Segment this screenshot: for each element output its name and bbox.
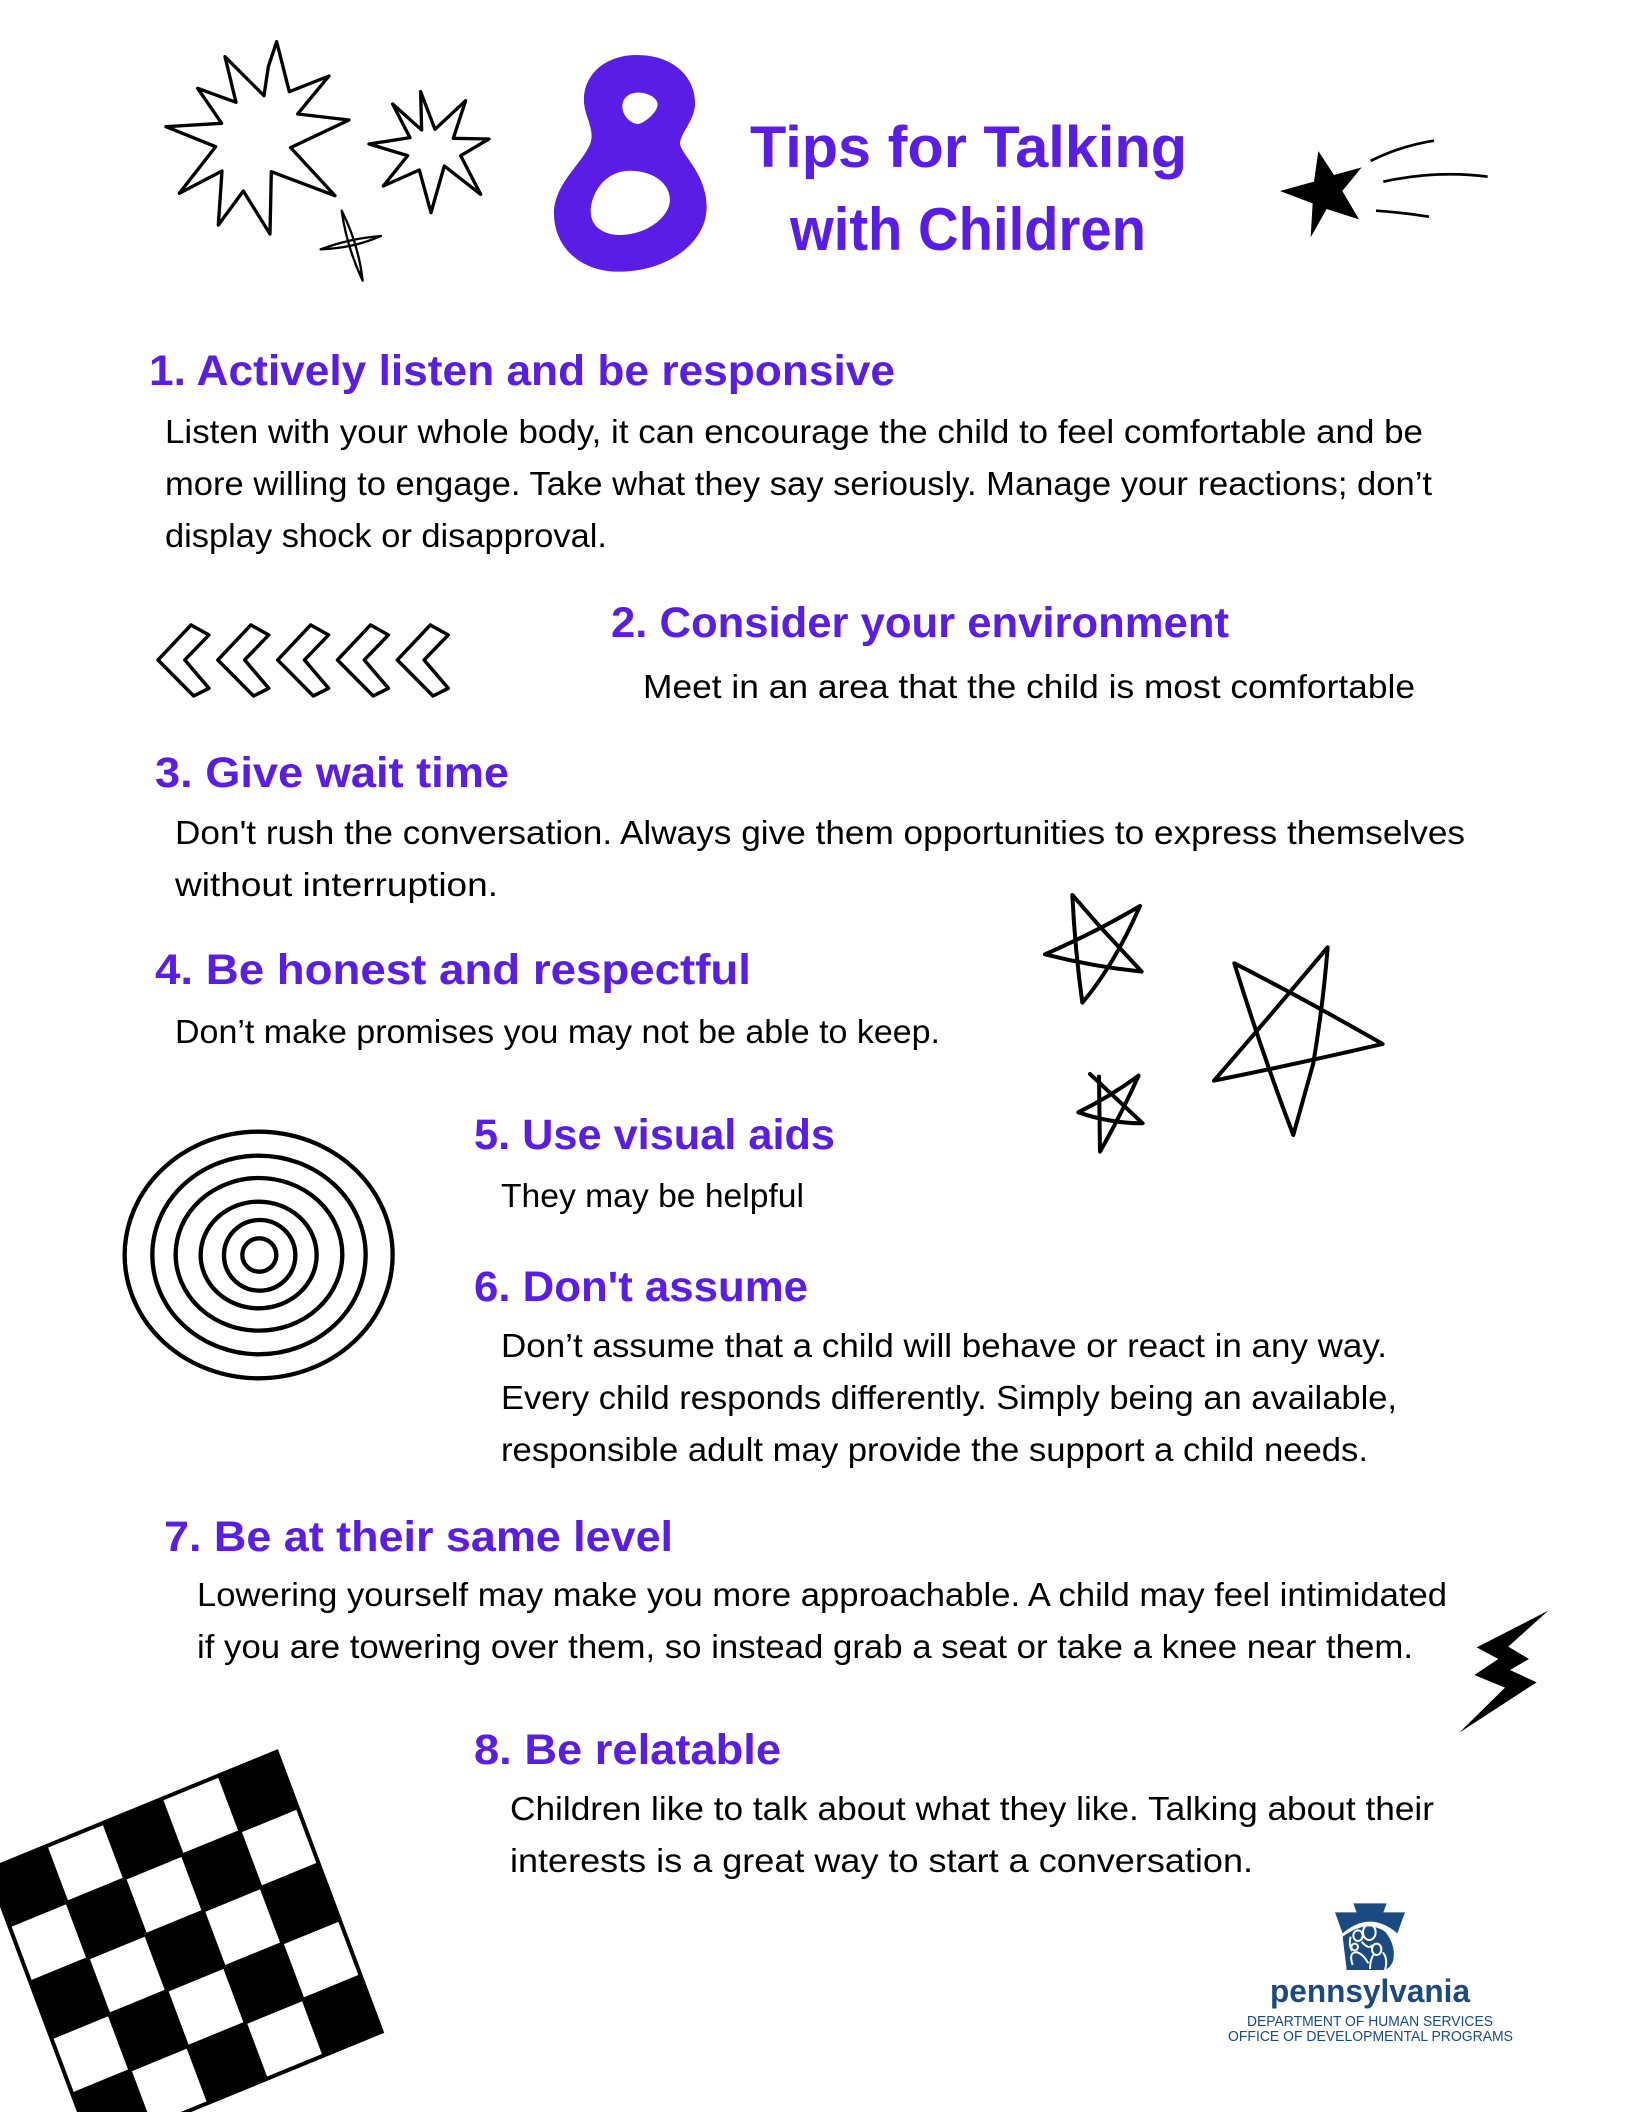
tip 2: Meet in an area that the child is most comfortable [643, 668, 1415, 705]
tip 8: 8. Be relatable [474, 1726, 781, 1774]
tip 7: if you are towering over them, so instead grab a seat or take a knee near them. [197, 1628, 1413, 1665]
tip 4: Don’t make promises you may not be able to keep. [175, 1013, 940, 1050]
tip 7 [164, 1513, 1447, 1665]
icon: lightning bolt [1459, 1611, 1548, 1733]
icon: concentric circles [125, 1132, 393, 1378]
tip 3: Don't rush the conversation. Always give them opportunities to express themselves [175, 814, 1465, 851]
tip 8 [474, 1726, 1434, 1879]
title numeral 8: 8 [549, 0, 715, 332]
tip 3: 3. Give wait time [155, 749, 509, 797]
logo: Pennsylvania DHS: pennsylvania [1270, 1973, 1470, 2009]
tip 1: Listen with your whole body, it can encourage the child to feel comfortable and be [165, 413, 1423, 450]
tip 5: They may be helpful [501, 1177, 804, 1214]
icon: shooting star [1280, 141, 1488, 237]
tip 5 [474, 1111, 835, 1214]
tip 6: 6. Don't assume [474, 1263, 808, 1311]
logo: Pennsylvania DHS: DEPARTMENT OF HUMAN SERVICES [1247, 2014, 1493, 2030]
tip 4 [155, 946, 940, 1050]
logo keystone [1335, 1903, 1405, 1970]
title: Tips for Talking [750, 115, 1187, 180]
title [750, 115, 1187, 263]
icon: chevrons [158, 625, 448, 696]
icon: starbursts [166, 42, 489, 281]
tip 1: more willing to engage. Take what they say seriously. Manage your reactions; don’t [165, 465, 1432, 502]
tip 1: 1. Actively listen and be responsive [149, 347, 895, 395]
tip 3 [155, 749, 1465, 903]
tip 7: Lowering yourself may make you more approachable. A child may feel intimidated [197, 1576, 1447, 1613]
logo: Pennsylvania DHS: OFFICE OF DEVELOPMENTAL PROGRAMS [1228, 2029, 1513, 2045]
logo: Pennsylvania DHS [1228, 1903, 1513, 2045]
tip 8: interests is a great way to start a conversation. [510, 1842, 1253, 1879]
tip 2 [611, 599, 1415, 705]
title: with Children [789, 196, 1146, 263]
tip 8: Children like to talk about what they like. Talking about their [510, 1790, 1434, 1827]
tip 1 [149, 347, 1432, 554]
tip 3: without interruption. [174, 866, 498, 903]
tip 6: responsible adult may provide the support a child needs. [501, 1431, 1368, 1468]
tip 7: 7. Be at their same level [164, 1513, 673, 1561]
tip 2: 2. Consider your environment [611, 599, 1229, 647]
icon: checkerboard [0, 1752, 382, 2112]
tip 1: display shock or disapproval. [165, 517, 607, 554]
tip 6 [474, 1263, 1397, 1468]
icon: hand-drawn stars [1045, 895, 1383, 1152]
tip 6: Don’t assume that a child will behave or react in any way. [501, 1327, 1387, 1364]
tip 4: 4. Be honest and respectful [155, 946, 751, 994]
tip 6: Every child responds differently. Simply being an available, [501, 1379, 1397, 1416]
tip 5: 5. Use visual aids [474, 1111, 835, 1159]
